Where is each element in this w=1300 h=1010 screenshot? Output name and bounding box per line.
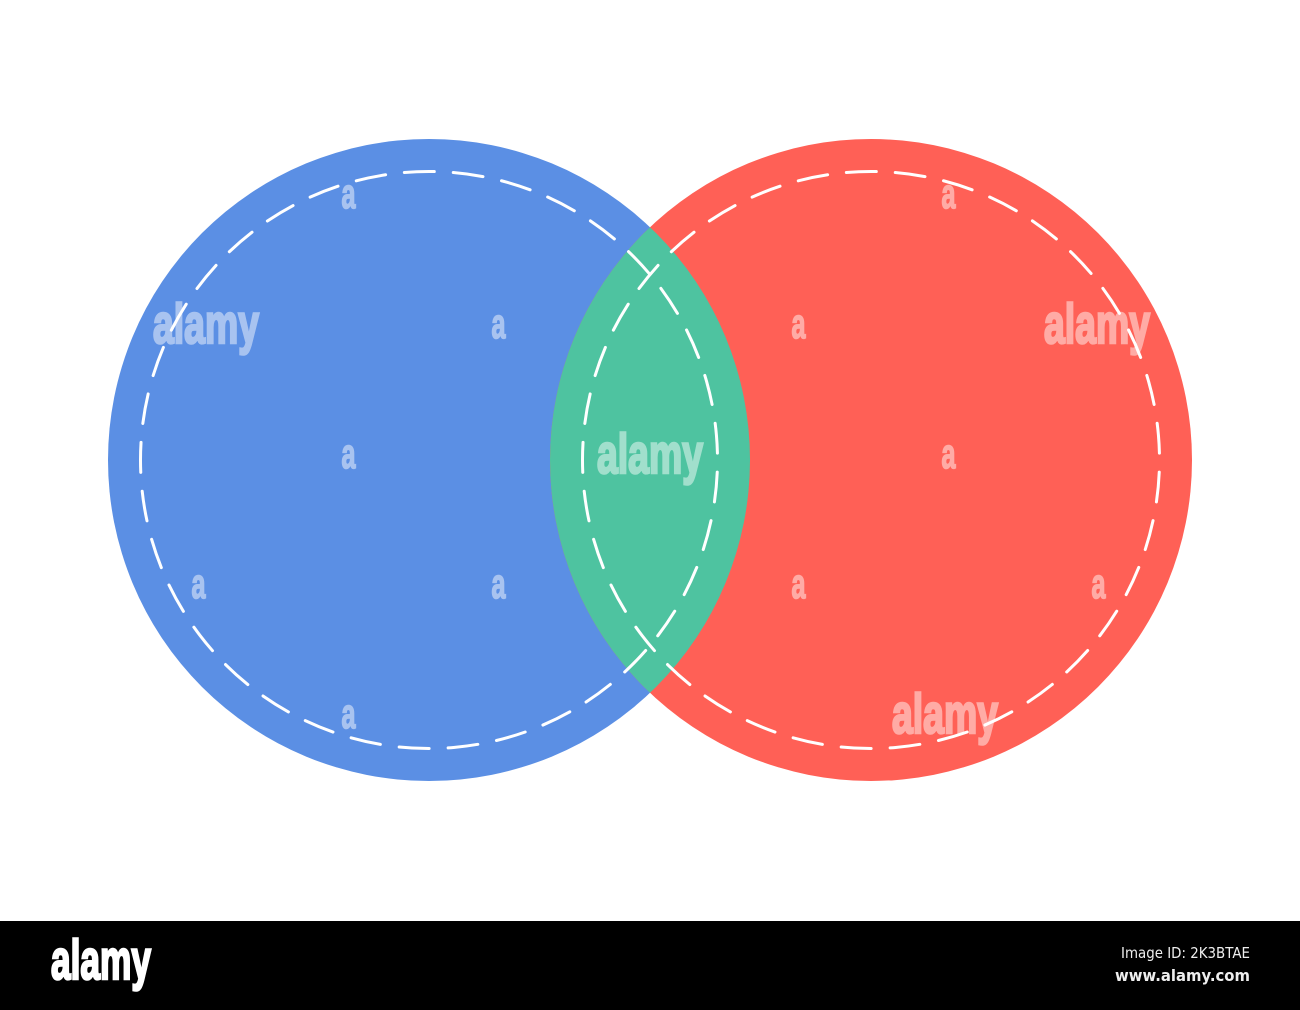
small watermark letters: a: [792, 560, 806, 607]
small watermark letters: a: [342, 690, 356, 737]
watermark: right circle: alamy: [1044, 292, 1150, 355]
bottom black footer bar: [0, 921, 1300, 1010]
small watermark letters: a: [942, 430, 956, 477]
small watermark letters: a: [492, 560, 506, 607]
footer image id: Image ID: 2K3BTAE: [1121, 944, 1250, 962]
watermark: overlap: alamy: [597, 422, 703, 485]
watermarks: [153, 170, 1150, 745]
small watermark letters: a: [342, 170, 356, 217]
watermark: left circle: alamy: [153, 292, 259, 355]
small watermark letters: [192, 170, 1106, 737]
small watermark letters: a: [192, 560, 206, 607]
right dashed inner ring: [559, 148, 1183, 772]
left blue circle: [108, 139, 750, 781]
small watermark letters: a: [792, 300, 806, 347]
watermark: bottom right circle: alamy: [892, 682, 998, 745]
green overlap region: [550, 227, 750, 693]
footer logo: alamy: [51, 928, 151, 991]
small watermark letters: a: [942, 170, 956, 217]
small watermark letters: a: [1092, 560, 1106, 607]
left dashed inner ring: [117, 148, 741, 772]
small watermark letters: a: [492, 300, 506, 347]
small watermark letters: a: [342, 430, 356, 477]
footer website: www.alamy.com: [1115, 966, 1250, 985]
right red circle: [550, 139, 1192, 781]
